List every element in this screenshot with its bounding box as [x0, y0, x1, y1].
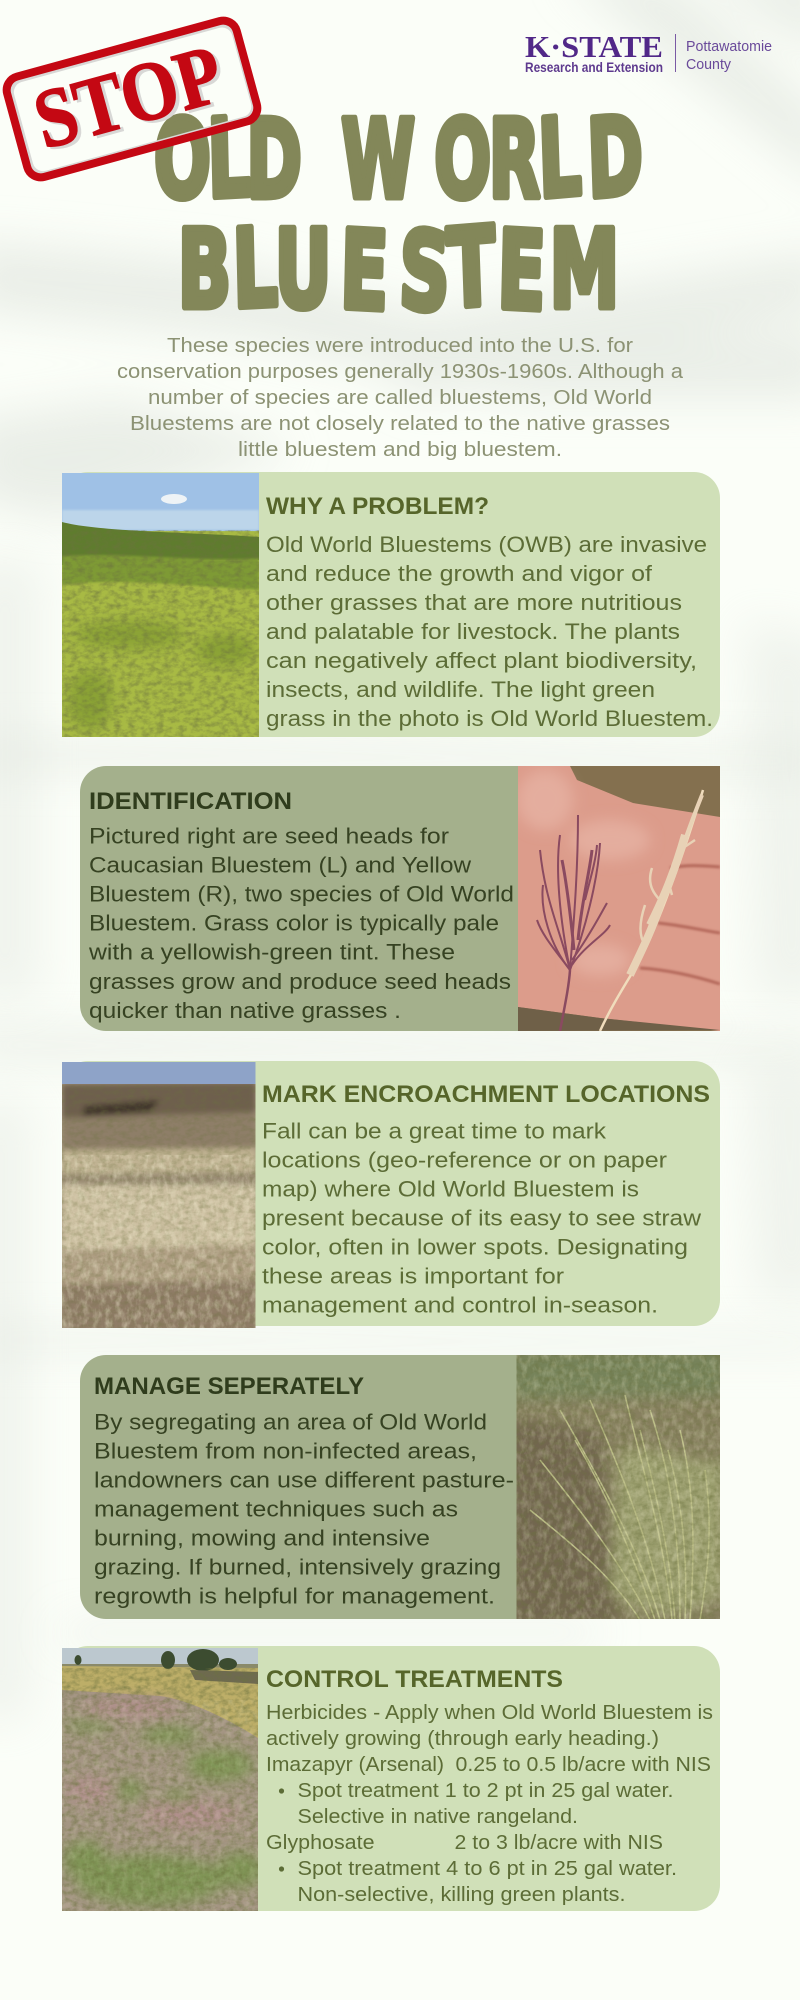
body text: management and control in-season.: [262, 1292, 658, 1318]
panel: identification: [80, 766, 720, 1031]
logo: K-State Research and Extension, Pottawatomie County: Pottawatomie: [686, 38, 772, 55]
intro text: little bluestem and big bluestem.: [238, 438, 562, 461]
body text: these areas is important for: [262, 1264, 564, 1288]
logo: K-State Research and Extension, Pottawatomie County: K·STATE: [525, 29, 663, 64]
panel: control treatments: [62, 1646, 720, 1911]
photo: straw-coloured grass on rolling prairie: [62, 1062, 256, 1340]
intro text: These species were introduced into the U.S. for: [167, 334, 633, 357]
body text: Bluestem. Grass color is typically pale: [89, 910, 499, 936]
herbicide text: Spot treatment 4 to 6 pt in 25 gal water.: [298, 1858, 677, 1880]
panel: mark encroachment locations: [62, 1061, 720, 1340]
body text: Bluestem (R), two species of Old World: [89, 882, 514, 906]
logo: K-State Research and Extension, Pottawatomie County: [525, 29, 772, 75]
body text: [94, 1410, 514, 1608]
heading: IDENTIFICATION: [89, 788, 292, 815]
body text: grasses grow and produce seed heads: [89, 969, 511, 994]
body text: grazing. If burned, intensively grazing: [94, 1554, 501, 1580]
herbicide text: 0.25 to 0.5 lb/acre with NIS: [456, 1754, 711, 1776]
body text: [262, 1118, 701, 1318]
intro text: [117, 334, 684, 461]
herbicide text: 2 to 3 lb/acre with NIS: [454, 1832, 663, 1854]
herbicide text: Non-selective, killing green plants.: [298, 1884, 626, 1906]
body text: By segregating an area of Old World: [94, 1410, 487, 1434]
body text: color, often in lower spots. Designating: [262, 1234, 688, 1260]
herbicide text: Imazapyr (Arsenal): [266, 1754, 444, 1776]
title: Old World Bluestem: [154, 94, 645, 337]
photo: treated pasture with trees: [62, 1648, 264, 1911]
herbicide text: actively growing (through early heading.): [266, 1728, 659, 1750]
heading: WHY A PROBLEM?: [266, 493, 489, 520]
body text: [88, 824, 514, 1023]
intro text: Bluestems are not closely related to the native grasses: [130, 412, 670, 435]
panel: manage separately: [80, 1350, 725, 1625]
body text: map) where Old World Bluestem is: [262, 1176, 639, 1202]
body text: can negatively affect plant biodiversity,: [266, 648, 697, 673]
body text: locations (geo-reference or on paper: [262, 1148, 667, 1172]
body text: Bluestem from non-infected areas,: [94, 1438, 477, 1464]
herbicide text: [266, 1702, 713, 1906]
body text: landowners can use different pasture-: [94, 1468, 514, 1492]
heading: MARK ENCROACHMENT LOCATIONS: [262, 1081, 710, 1108]
intro text: number of species are called bluestems, Old World: [148, 386, 652, 409]
photo: bright green invaded pasture: [62, 473, 259, 737]
body text: with a yellowish-green tint. These: [88, 940, 455, 964]
body text: management techniques such as: [94, 1496, 458, 1522]
body text: grass in the photo is Old World Bluestem.: [266, 706, 713, 731]
body text: Fall can be a great time to mark: [262, 1118, 607, 1144]
title: Old World Bluestem: BLUESTEM: [178, 204, 619, 337]
body text: [266, 532, 713, 731]
intro text: conservation purposes generally 1930s-1960s. Although a: [117, 360, 684, 383]
body text: regrowth is helpful for management.: [94, 1584, 495, 1608]
body text: other grasses that are more nutritious: [266, 590, 682, 615]
logo: K-State Research and Extension, Pottawatomie County: Research and Extension: [525, 59, 663, 75]
herbicide text: Glyphosate: [266, 1832, 374, 1854]
body text: present because of its easy to see straw: [262, 1206, 701, 1230]
photo: clump of bluestem grass: [510, 1350, 725, 1625]
panel: why a problem: [62, 472, 720, 737]
body text: and reduce the growth and vigor of: [266, 561, 653, 586]
body text: and palatable for livestock. The plants: [266, 619, 680, 644]
stamp: STOP: STOP: [25, 27, 232, 167]
herbicide text: Herbicides - Apply when Old World Bluestem is: [266, 1702, 713, 1724]
body text: Pictured right are seed heads for: [89, 824, 449, 848]
body text: burning, mowing and intensive: [94, 1526, 430, 1550]
stamp: STOP: STOP: [28, 30, 236, 169]
photo: hand holding two seed heads: [517, 766, 720, 1031]
body text: insects, and wildlife. The light green: [266, 677, 655, 702]
body text: Old World Bluestems (OWB) are invasive: [266, 532, 707, 557]
title: Old World Bluestem: OLD WORLD: [154, 94, 645, 223]
heading: MANAGE SEPERATELY: [94, 1373, 364, 1400]
herbicide text: Spot treatment 1 to 2 pt in 25 gal water.: [298, 1780, 674, 1802]
herbicide text: Selective in native rangeland.: [298, 1806, 578, 1828]
logo: K-State Research and Extension, Pottawatomie County: County: [686, 56, 731, 73]
body text: quicker than native grasses .: [89, 998, 401, 1023]
body text: Caucasian Bluestem (L) and Yellow: [89, 852, 471, 878]
heading: CONTROL TREATMENTS: [266, 1666, 563, 1693]
